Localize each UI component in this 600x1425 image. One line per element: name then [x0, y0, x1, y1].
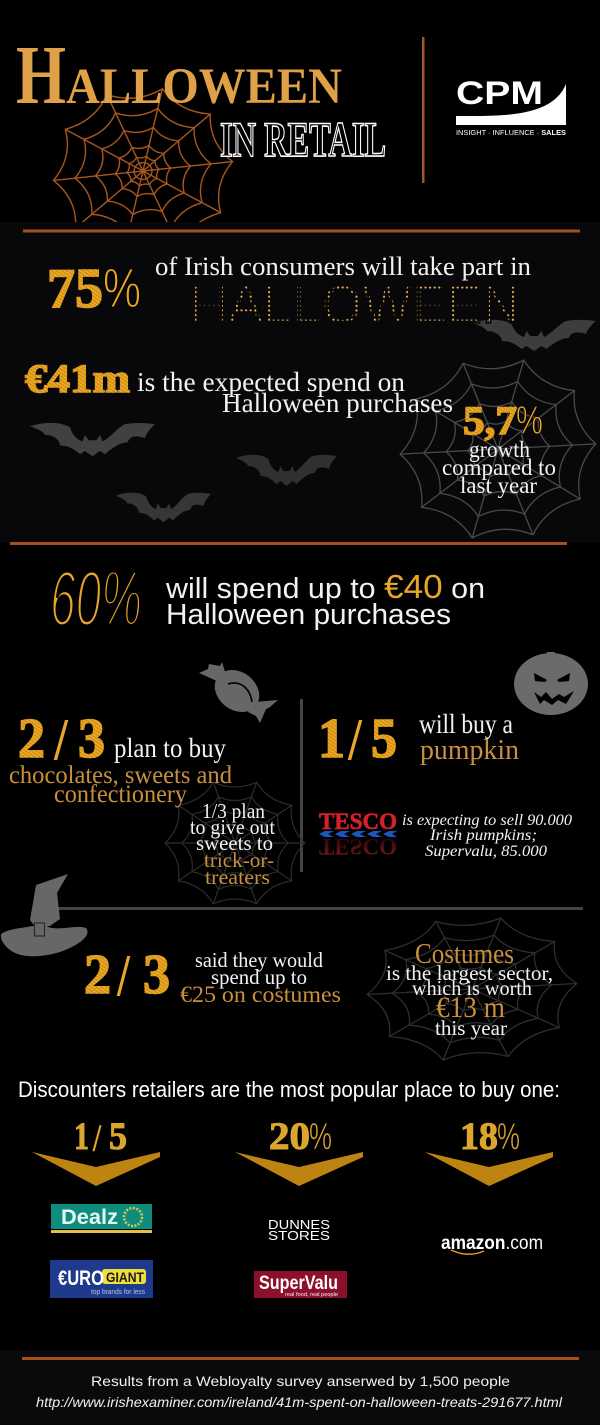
- icon: bat middle: [236, 455, 337, 486]
- stat: 2/3 plan to buy: confectionery: [54, 779, 187, 808]
- stat: 2/3 costumes: said they would: [195, 948, 323, 972]
- logo: Amazon: amazon.com: [441, 1233, 543, 1254]
- text: of Irish consumers: of Irish consumers will take part in: [155, 252, 531, 281]
- text: expected spend: [137, 367, 453, 418]
- panel: consumer spend band: [0, 222, 600, 543]
- stat: 1/5 pumpkin: will buy a: [419, 709, 513, 739]
- stat: 18% with arrow: [425, 1115, 553, 1186]
- stat: 2/3 costumes: 3: [143, 944, 170, 1006]
- text: survey source: Results from a Webloyalty survey anserwed by 1,500 people: [91, 1373, 510, 1389]
- logo: Eurogiant: top brands for less: [91, 1289, 145, 1296]
- text: pumpkin sales: Supervalu, 85.000: [425, 843, 547, 860]
- stat: 2/3 plan to buy: /: [53, 709, 69, 772]
- stat: 1/5 pumpkin: 5: [371, 708, 397, 770]
- stat: 2/3 costumes: [84, 944, 341, 1008]
- text: pumpkin sales: [402, 812, 572, 860]
- icon: candy: [199, 661, 278, 723]
- logo: Dunnes Stores: DUNNES: [268, 1218, 330, 1232]
- text: expected spend: Halloween purchases: [222, 388, 453, 418]
- stat: 2/3 costumes: spend up to: [211, 965, 307, 989]
- divider: header: [422, 37, 424, 183]
- logo: Eurogiant: €URO: [58, 1267, 104, 1290]
- text: will spend up to 40: [165, 568, 485, 631]
- text: costumes sector: [386, 939, 553, 1040]
- stat: 2/3 plan to buy: chocolates, sweets and: [9, 760, 232, 789]
- stat: 5,7% growth: [442, 398, 556, 499]
- stat: 5,7% growth: last year: [460, 473, 537, 499]
- text: will spend up to 40: Halloween purchases: [166, 599, 451, 631]
- stat: 1/5 pumpkin: 1: [318, 708, 345, 770]
- stat: 20% with arrow: 20: [269, 1115, 310, 1158]
- text: expected spend: is the expected spend on: [137, 367, 405, 397]
- stat: 20% with arrow: %: [309, 1116, 332, 1158]
- logo: Eurogiant: GIANT: [106, 1269, 144, 1285]
- divider: horizontal: [58, 907, 583, 910]
- title: Halloween: H: [16, 29, 66, 122]
- stat: 2/3 costumes: €25 on costumes: [180, 982, 341, 1008]
- logo: Eurogiant: [50, 1260, 153, 1298]
- text: 1/3 trick-or-treaters: to give out: [190, 815, 275, 839]
- icon: small spider web: [165, 782, 305, 904]
- stat: 18% with arrow: %: [497, 1116, 520, 1158]
- stat: 75%: %: [103, 256, 141, 319]
- text: costumes sector: Costumes: [415, 939, 514, 970]
- stat: 5,7% growth: growth: [469, 437, 530, 463]
- stat: 2/3 plan to buy: [9, 708, 232, 808]
- stat: 18% with arrow: 18: [460, 1115, 498, 1158]
- icon: pumpkin: [514, 652, 588, 715]
- icon: witch hat: [1, 874, 88, 956]
- stat: 60%: 60%: [50, 554, 142, 642]
- text: 1/3 trick-or-treaters: sweets to: [196, 831, 273, 855]
- text: costumes sector: this year: [435, 1016, 507, 1040]
- text: 1/3 trick-or-treaters: treaters: [205, 865, 270, 889]
- text: pumpkin sales: Irish pumpkins;: [429, 827, 537, 844]
- logo: Dealz: Dealz: [61, 1206, 118, 1229]
- stat: 1/5 with arrow: [32, 1115, 160, 1186]
- stat: 2/3 costumes: 2: [84, 944, 111, 1006]
- stat: 75%: [47, 256, 141, 320]
- icon: orange spider web: [45, 82, 241, 260]
- logo: SuperValu: SuperValu: [259, 1273, 338, 1294]
- text: 1/3 trick-or-treaters: [190, 799, 275, 889]
- stat: 2/3 plan to buy: 2: [18, 708, 45, 770]
- text: will spend up to 40: will spend up to €40 on: [165, 568, 485, 605]
- text: dotted Halloween: HALLOWEEN: [190, 275, 520, 335]
- stat: 5,7% growth: %: [516, 399, 543, 443]
- icon: bat top right: [472, 320, 596, 351]
- text: costumes sector: which is worth: [412, 976, 532, 1000]
- panel: footer: [0, 1350, 600, 1425]
- text: 1/3 trick-or-treaters: 1/3 plan: [202, 799, 265, 823]
- text: pumpkin sales: is expecting to sell 90.000: [402, 812, 572, 829]
- title: Halloween: ALLOWEEN: [66, 59, 342, 115]
- stat: 5,7% growth: compared to: [442, 455, 556, 481]
- subtitle: in retail: IN RETAIL: [220, 111, 386, 167]
- stat: 1/5 with arrow: 5: [109, 1115, 127, 1158]
- header: [16, 29, 566, 260]
- stat: 75%: 75: [47, 258, 103, 320]
- stat: 1/5 pumpkin: [318, 708, 519, 772]
- logo: Dealz: [51, 1204, 152, 1233]
- icon: costumes spider web: [364, 914, 580, 1064]
- stat: 1/5 pumpkin: /: [347, 709, 363, 772]
- logo: SuperValu: real food, real people: [285, 1292, 338, 1298]
- stat: 5,7% growth: 5,7: [463, 398, 517, 443]
- stat: 1/5 with arrow: 1: [74, 1115, 89, 1158]
- text: costumes sector: is the largest sector,: [386, 961, 553, 985]
- stat: 20% with arrow: [235, 1115, 363, 1186]
- logo: CPM: CPM: [456, 75, 543, 111]
- divider: vertical: [300, 699, 303, 872]
- icon: grey spider web: [396, 357, 600, 541]
- text: 1/3 trick-or-treaters: trick-or-: [204, 848, 274, 872]
- text: costumes sector: €13 m: [436, 991, 505, 1024]
- logo: Dunnes Stores: STORES: [268, 1229, 330, 1243]
- logo: Tesco: TESCO: [319, 809, 397, 834]
- stat: 1/5 with arrow: /: [92, 1118, 102, 1159]
- title: Halloween: [16, 29, 342, 122]
- logo: CPM: INSIGHT · INFLUENCE · SALES: [456, 130, 566, 137]
- text: source URL: http://www.irishexaminer.com/ireland/41m-spent-on-halloween-treats-291677.html: [36, 1394, 563, 1410]
- heading: discounters: Discounters retailers are the most popular place to buy one:: [18, 1077, 560, 1102]
- logo: Tesco: [319, 809, 397, 859]
- stat: 2/3 plan to buy: 3: [78, 708, 105, 770]
- logo: CPM: [456, 75, 566, 137]
- stat: 2/3 plan to buy: plan to buy: [114, 733, 226, 763]
- stat: 41m: €41m: [25, 356, 130, 401]
- icon: bat low: [116, 493, 211, 522]
- stat: 1/5 pumpkin: pumpkin: [420, 734, 519, 766]
- icon: bat left: [30, 423, 155, 456]
- logo: Dunnes Stores: [268, 1218, 330, 1243]
- logo: Tesco: TESCO: [319, 834, 397, 859]
- stat: 2/3 costumes: /: [116, 945, 131, 1008]
